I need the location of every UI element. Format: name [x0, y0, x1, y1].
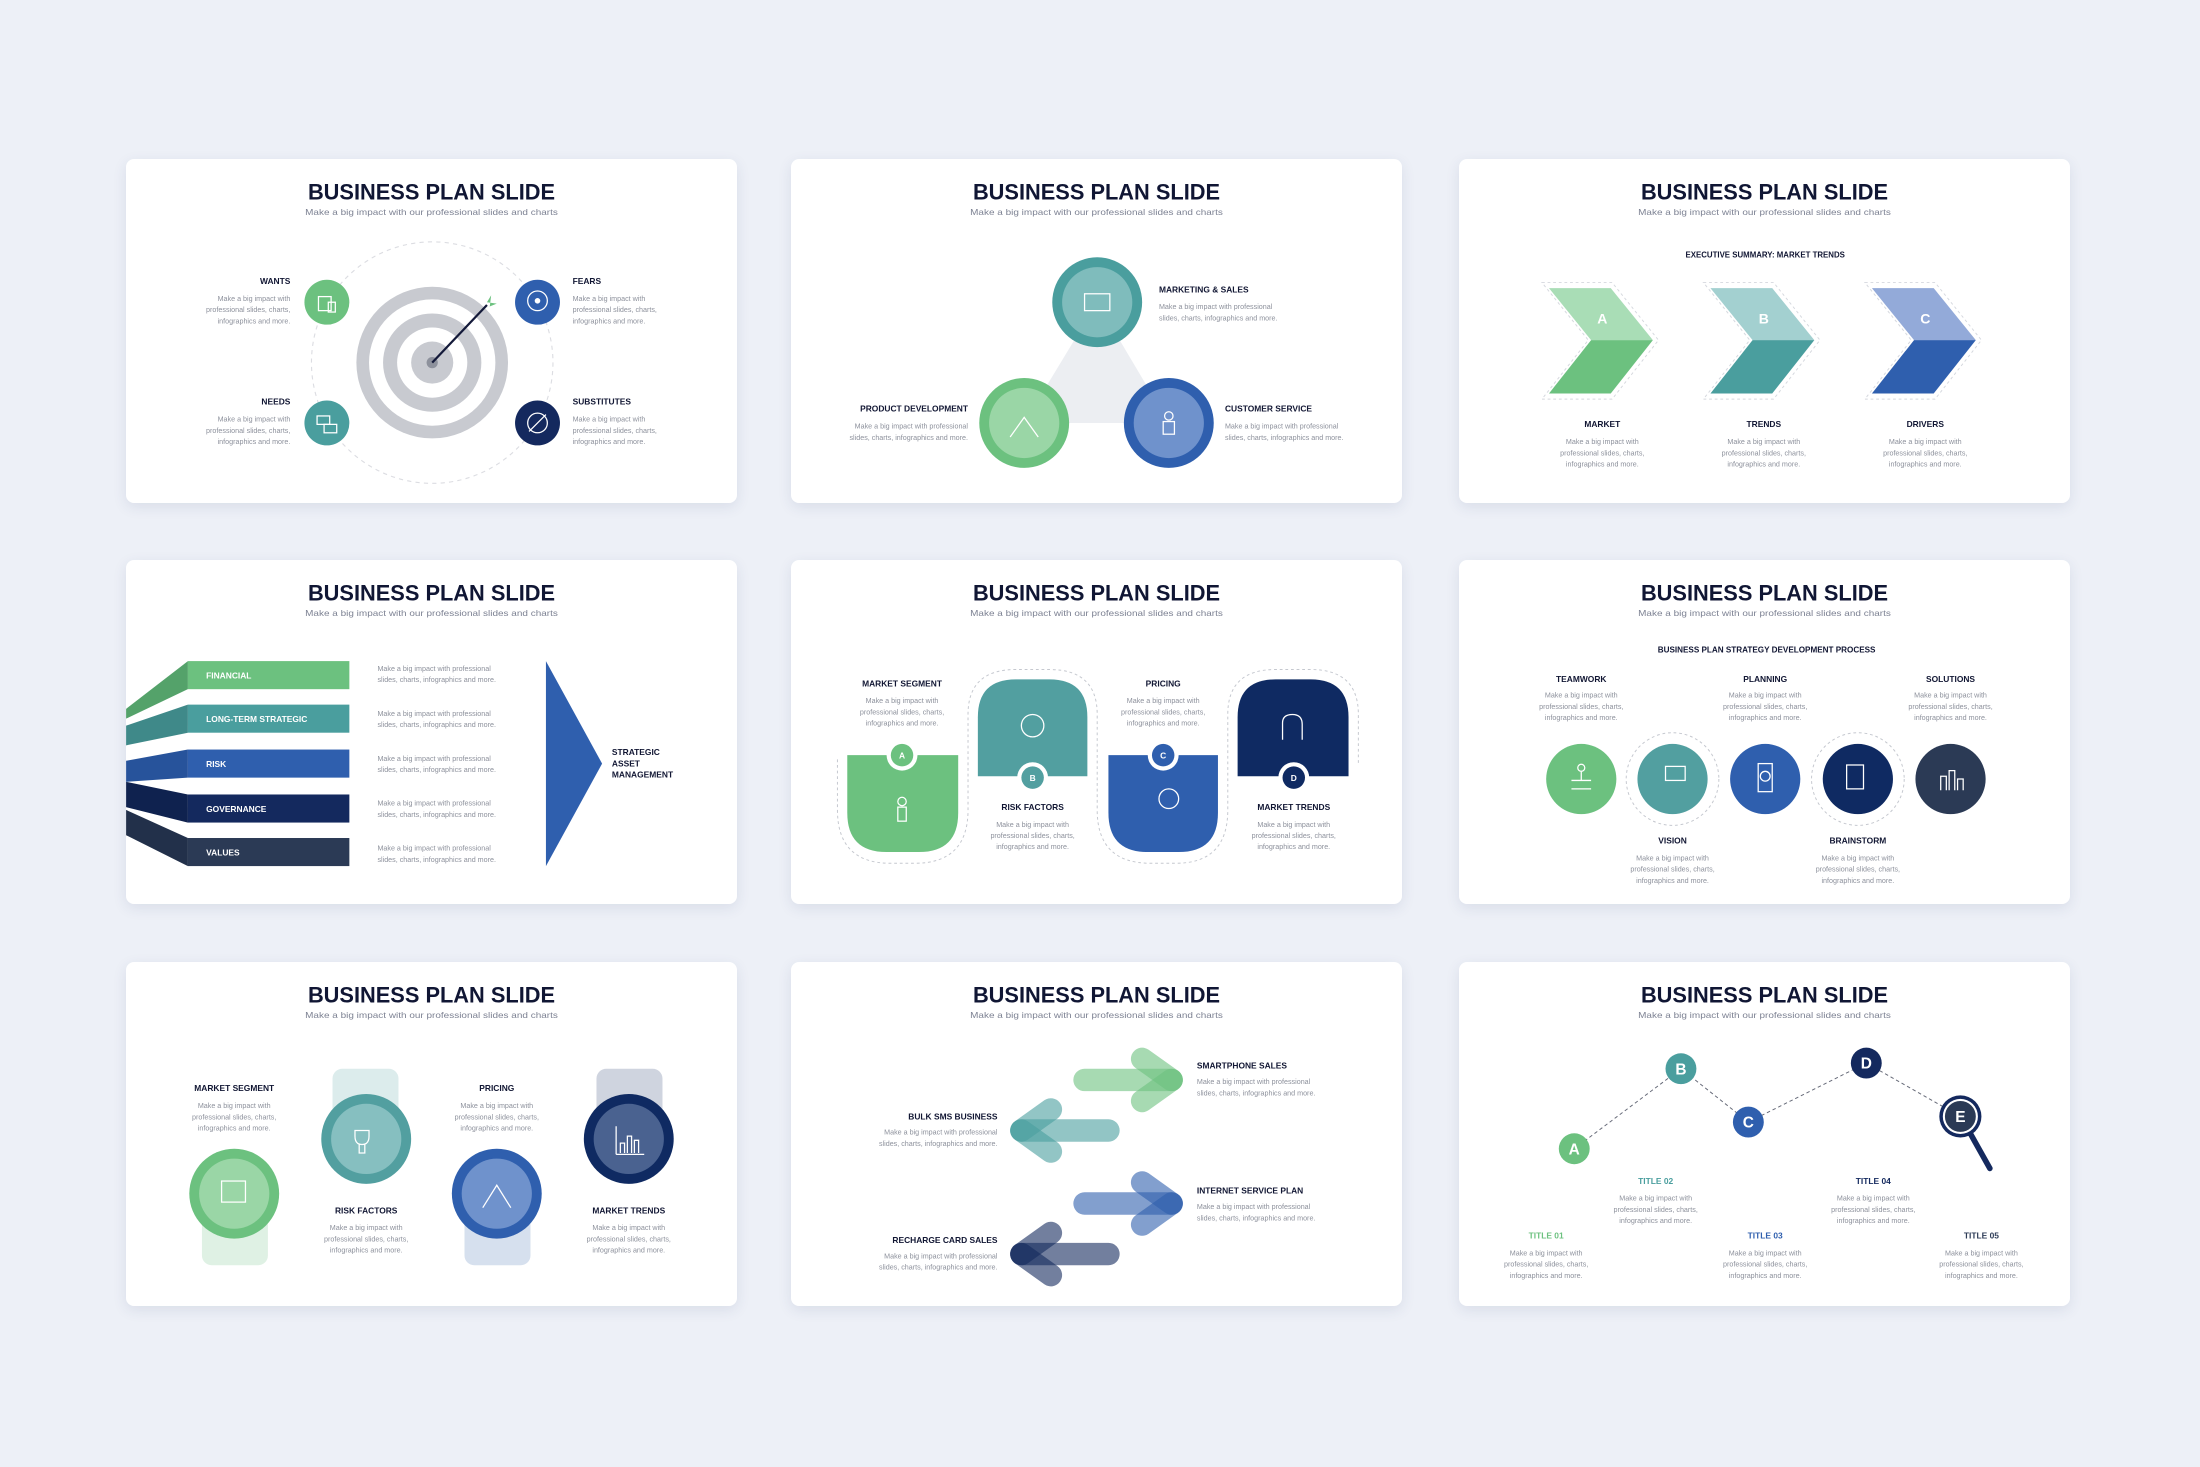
slide 9: zigzag timeline — [1459, 962, 2070, 1306]
title: BUSINESS PLAN SLIDE — [1641, 581, 1888, 606]
text: smartphone sales: Make a big impact with professional — [1197, 1078, 1311, 1086]
slide 1: wants needs fears substitutes — [126, 159, 737, 503]
text: market: infographics and more. — [1566, 460, 1639, 468]
text: brainstorm: professional slides, charts, — [1816, 866, 1900, 874]
title: Make a big impact with our professional slides and charts — [970, 1011, 1223, 1020]
text: brainstorm: infographics and more. — [1821, 877, 1894, 885]
title — [970, 180, 1223, 217]
shape D — [1238, 679, 1349, 793]
title — [970, 983, 1223, 1020]
descriptions — [377, 665, 496, 864]
text: solutions: professional slides, charts, — [1908, 703, 1993, 711]
node D — [1851, 1048, 1882, 1079]
descriptions: slides, charts, infographics and more. — [377, 721, 496, 729]
shape A — [847, 740, 958, 852]
text: title 02: Make a big impact with — [1619, 1195, 1692, 1203]
slide 4: ribbons to triangle — [126, 560, 737, 904]
text: title 05: TITLE 05 — [1964, 1231, 1999, 1241]
watch: market segment — [189, 1149, 279, 1265]
chevron A — [1542, 283, 1658, 399]
text: market trends: MARKET TRENDS — [1257, 802, 1331, 812]
text: solutions: SOLUTIONS — [1926, 674, 1975, 684]
text: pricing: Make a big impact with — [1127, 697, 1200, 705]
target chart — [356, 287, 508, 438]
descriptions: slides, charts, infographics and more. — [377, 856, 496, 864]
text: risk factors: infographics and more. — [996, 843, 1069, 851]
text: strategic asset management: MANAGEMENT — [612, 770, 674, 780]
text: solutions: Make a big impact with — [1914, 692, 1987, 700]
title: Make a big impact with our professional slides and charts — [305, 1011, 558, 1020]
text: title 05: infographics and more. — [1945, 1272, 2018, 1280]
text: pricing: infographics and more. — [460, 1124, 533, 1132]
descriptions: slides, charts, infographics and more. — [377, 676, 496, 684]
text: title 04: professional slides, charts, — [1831, 1206, 1915, 1214]
text: smartphone sales: SMARTPHONE SALES — [1197, 1061, 1287, 1071]
text: teamwork: infographics and more. — [1545, 714, 1618, 722]
text: trends — [1722, 419, 1806, 468]
text: bulk sms business — [879, 1111, 998, 1148]
icon: wants — [304, 280, 349, 325]
text: risk factors: RISK FACTORS — [335, 1205, 398, 1215]
shape B — [978, 679, 1087, 793]
text: substitutes — [573, 397, 657, 446]
icon: substitutes — [515, 401, 560, 445]
text: risk factors — [324, 1205, 408, 1255]
text: title 02 — [1614, 1176, 1698, 1225]
text: teamwork: professional slides, charts, — [1539, 703, 1623, 711]
text: wants: WANTS — [260, 276, 291, 286]
text: product development: slides, charts, infographics and more. — [849, 434, 968, 442]
title — [305, 180, 558, 217]
watch: risk factors — [321, 1069, 411, 1184]
text: customer service: Make a big impact with professional — [1225, 423, 1339, 431]
chevron A: A — [1597, 310, 1607, 326]
ribbon bars: RISK — [206, 759, 226, 769]
shape D: D — [1291, 773, 1297, 783]
circle: customer service — [1124, 378, 1214, 468]
arrow: navy left — [1021, 1233, 1108, 1275]
text: fears — [573, 276, 657, 325]
text: market segment: MARKET SEGMENT — [194, 1083, 275, 1093]
text: internet service plan: Make a big impact with professional — [1197, 1203, 1311, 1211]
text: fears: professional slides, charts, — [573, 306, 657, 314]
title — [1638, 180, 1891, 217]
text: recharge card sales: Make a big impact with professional — [884, 1252, 998, 1260]
chevron B: B — [1759, 310, 1769, 326]
shape B: B — [1030, 773, 1036, 783]
text: substitutes: professional slides, charts, — [573, 427, 657, 435]
text: pricing: professional slides, charts, — [455, 1113, 539, 1121]
text: pricing: infographics and more. — [1127, 720, 1200, 728]
text: product development — [849, 404, 969, 442]
connector triangle — [1024, 302, 1169, 423]
text: market segment: infographics and more. — [198, 1124, 271, 1132]
text: teamwork: TEAMWORK — [1556, 674, 1606, 684]
node B — [1666, 1053, 1696, 1084]
text: internet service plan: slides, charts, infographics and more. — [1197, 1214, 1315, 1222]
title: BUSINESS PLAN SLIDE — [308, 581, 555, 606]
text: market trends: MARKET TRENDS — [592, 1205, 666, 1215]
text: trends: TRENDS — [1747, 419, 1781, 429]
text: risk factors: professional slides, charts, — [324, 1235, 408, 1243]
text: internet service plan: INTERNET SERVICE PLAN — [1197, 1186, 1303, 1196]
text: title 01: TITLE 01 — [1529, 1231, 1564, 1241]
text: vision: VISION — [1658, 836, 1687, 846]
text: brainstorm: BRAINSTORM — [1829, 836, 1886, 846]
circle: marketing & sales — [1052, 257, 1142, 347]
chevron C: C — [1920, 310, 1930, 326]
text: trends: professional slides, charts, — [1722, 449, 1806, 457]
ribbon bars: LONG-TERM STRATEGIC — [206, 714, 307, 724]
text: planning: professional slides, charts, — [1723, 703, 1807, 711]
icon: fears — [515, 280, 560, 325]
text: strategic asset management: STRATEGIC — [612, 747, 660, 757]
text: vision — [1630, 836, 1715, 885]
descriptions: slides, charts, infographics and more. — [377, 766, 496, 774]
text: trends: infographics and more. — [1727, 460, 1800, 468]
text: trends: Make a big impact with — [1727, 438, 1800, 446]
text: market segment: infographics and more. — [866, 720, 938, 728]
text: wants: Make a big impact with — [218, 295, 290, 303]
title — [305, 983, 558, 1020]
circle: product development — [979, 378, 1069, 468]
text: risk factors: infographics and more. — [330, 1247, 403, 1255]
text: needs: infographics and more. — [218, 438, 290, 446]
text: solutions: infographics and more. — [1914, 714, 1987, 722]
descriptions: Make a big impact with professional — [377, 845, 491, 853]
title: BUSINESS PLAN SLIDE — [973, 983, 1220, 1008]
text: needs: professional slides, charts, — [206, 427, 290, 435]
text: internet service plan — [1197, 1186, 1315, 1222]
chevron B — [1703, 283, 1820, 399]
triangle arrow — [546, 661, 602, 866]
text: drivers: infographics and more. — [1889, 460, 1962, 468]
title: BUSINESS PLAN SLIDE — [973, 180, 1220, 205]
title: Make a big impact with our professional slides and charts — [970, 609, 1223, 618]
text: risk factors: Make a big impact with — [330, 1224, 403, 1232]
shape C — [1108, 740, 1218, 852]
text: teamwork — [1539, 674, 1623, 722]
text: pricing: PRICING — [479, 1083, 515, 1093]
slide 3: chevrons — [1459, 159, 2070, 503]
ribbon bars — [126, 661, 349, 866]
text: risk factors: Make a big impact with — [996, 821, 1069, 829]
text: title 04: Make a big impact with — [1837, 1195, 1910, 1203]
text: recharge card sales: RECHARGE CARD SALES — [892, 1235, 998, 1245]
descriptions: Make a big impact with professional — [377, 755, 491, 763]
text: customer service: CUSTOMER SERVICE — [1225, 404, 1312, 414]
text: title 01: infographics and more. — [1510, 1272, 1583, 1280]
node E magnifier: E — [1955, 1109, 1966, 1126]
text: substitutes: Make a big impact with — [573, 416, 645, 424]
slide 5: alternating shapes — [791, 560, 1402, 904]
text: vision: Make a big impact with — [1636, 854, 1709, 862]
text: title 01: professional slides, charts, — [1504, 1261, 1588, 1269]
title: Make a big impact with our professional slides and charts — [1638, 1011, 1891, 1020]
text: planning: PLANNING — [1743, 674, 1788, 684]
text: title 03: TITLE 03 — [1748, 1231, 1783, 1241]
node C — [1733, 1107, 1764, 1138]
text: wants: professional slides, charts, — [206, 306, 290, 314]
text: risk factors: RISK FACTORS — [1001, 802, 1064, 812]
text: vision: infographics and more. — [1636, 877, 1709, 885]
text: market trends: Make a big impact with — [592, 1224, 665, 1232]
title — [970, 581, 1223, 618]
text: strategic asset management: ASSET — [612, 758, 641, 768]
icon: needs — [304, 401, 349, 445]
title: BUSINESS PLAN SLIDE — [973, 581, 1220, 606]
ribbon bars: VALUES — [206, 848, 240, 858]
text: market trends — [1252, 802, 1336, 851]
text: drivers — [1883, 419, 1967, 468]
text: market trends: infographics and more. — [1257, 843, 1330, 851]
text: fears: infographics and more. — [573, 317, 645, 325]
slide 7: watch circles — [126, 962, 737, 1306]
text: market trends: professional slides, charts, — [587, 1235, 671, 1243]
text: market: MARKET — [1584, 419, 1621, 429]
text: title 05: Make a big impact with — [1945, 1249, 2018, 1257]
text: market trends: infographics and more. — [592, 1247, 665, 1255]
slide 6: strategy process circles — [1459, 560, 2070, 904]
text: title 03: infographics and more. — [1729, 1272, 1802, 1280]
arrow: blue right — [1085, 1182, 1172, 1225]
text: fears: Make a big impact with — [573, 295, 645, 303]
text: needs: Make a big impact with — [218, 416, 290, 424]
text: bulk sms business: Make a big impact with professional — [884, 1129, 998, 1137]
title: BUSINESS PLAN SLIDE — [1641, 983, 1888, 1008]
node C: C — [1743, 1115, 1754, 1132]
text: planning: infographics and more. — [1729, 714, 1802, 722]
text: smartphone sales — [1197, 1061, 1315, 1097]
arrow: teal left — [1021, 1109, 1108, 1152]
text: market segment: Make a big impact with — [866, 697, 938, 705]
text: planning — [1723, 674, 1807, 722]
text: market segment: Make a big impact with — [198, 1102, 271, 1110]
node A: A — [1569, 1141, 1580, 1158]
subheading: BUSINESS PLAN STRATEGY DEVELOPMENT PROCESS — [1658, 646, 1876, 655]
text: market segment: professional slides, charts, — [860, 708, 944, 716]
text: pricing: professional slides, charts, — [1121, 708, 1205, 716]
text: market trends: Make a big impact with — [1257, 821, 1330, 829]
title: Make a big impact with our professional slides and charts — [1638, 609, 1891, 618]
text: pricing — [1121, 678, 1205, 728]
descriptions: Make a big impact with professional — [377, 665, 491, 673]
text: market — [1560, 419, 1644, 468]
title: BUSINESS PLAN SLIDE — [308, 983, 555, 1008]
text: pricing — [455, 1083, 539, 1132]
node A — [1559, 1133, 1590, 1164]
text: title 05 — [1939, 1231, 2024, 1280]
text: market: professional slides, charts, — [1560, 449, 1644, 457]
text: risk factors — [990, 802, 1075, 851]
slide 2: triangle cycle — [791, 159, 1402, 503]
text: planning: Make a big impact with — [1729, 692, 1802, 700]
title: Make a big impact with our professional slides and charts — [305, 609, 558, 618]
text: marketing & sales: MARKETING & SALES — [1159, 284, 1249, 294]
descriptions: Make a big impact with professional — [377, 710, 491, 718]
text: marketing & sales — [1159, 284, 1278, 322]
subheading: EXECUTIVE SUMMARY: MARKET TRENDS — [1686, 250, 1845, 259]
node B: B — [1675, 1061, 1687, 1078]
text: fears: FEARS — [573, 276, 601, 286]
text: title 03 — [1723, 1231, 1807, 1280]
title: Make a big impact with our professional slides and charts — [305, 208, 558, 217]
text: vision: professional slides, charts, — [1630, 866, 1715, 874]
title — [305, 581, 558, 618]
title — [1638, 581, 1891, 618]
text: pricing: Make a big impact with — [460, 1102, 533, 1110]
text: market segment: MARKET SEGMENT — [862, 678, 943, 688]
text: needs — [206, 397, 291, 446]
slide 8: arrows — [791, 962, 1402, 1306]
text: title 01 — [1504, 1231, 1588, 1280]
text: title 02: infographics and more. — [1619, 1217, 1692, 1225]
text: wants — [206, 276, 291, 325]
text: product development: Make a big impact with professional — [855, 423, 968, 431]
text: title 03: professional slides, charts, — [1723, 1261, 1807, 1269]
watch: pricing — [452, 1149, 542, 1265]
descriptions: Make a big impact with professional — [377, 800, 491, 808]
text: substitutes: SUBSTITUTES — [573, 397, 631, 407]
text: title 05: professional slides, charts, — [1939, 1261, 2024, 1269]
text: title 01: Make a big impact with — [1510, 1249, 1583, 1257]
watch: market trends — [584, 1069, 674, 1184]
title — [1638, 983, 1891, 1020]
descriptions: slides, charts, infographics and more. — [377, 811, 496, 819]
text: wants: infographics and more. — [218, 317, 290, 325]
text: marketing & sales: Make a big impact with professional — [1159, 303, 1273, 311]
text: smartphone sales: slides, charts, infographics and more. — [1197, 1089, 1315, 1097]
text: strategic asset management — [612, 747, 674, 780]
text: market segment — [192, 1083, 276, 1132]
text: customer service — [1225, 404, 1344, 442]
arrow: green right — [1085, 1059, 1172, 1101]
text: market segment — [860, 678, 944, 728]
text: title 04: infographics and more. — [1837, 1217, 1910, 1225]
shape C: C — [1160, 751, 1166, 761]
text: customer service: slides, charts, infographics and more. — [1225, 434, 1344, 442]
text: market: Make a big impact with — [1566, 438, 1639, 446]
node E magnifier — [1939, 1095, 1990, 1168]
text: brainstorm: Make a big impact with — [1821, 854, 1894, 862]
text: needs: NEEDS — [261, 397, 291, 407]
text: marketing & sales: slides, charts, infographics and more. — [1159, 314, 1278, 322]
text: market trends — [587, 1205, 671, 1255]
chevron C — [1865, 283, 1981, 399]
text: drivers: professional slides, charts, — [1883, 449, 1967, 457]
node D: D — [1861, 1056, 1872, 1073]
text: brainstorm — [1816, 836, 1900, 885]
title: Make a big impact with our professional slides and charts — [1638, 208, 1891, 217]
text: product development: PRODUCT DEVELOPMENT — [860, 404, 969, 414]
text: title 03: Make a big impact with — [1729, 1249, 1802, 1257]
text: drivers: DRIVERS — [1907, 419, 1944, 429]
text: title 02: TITLE 02 — [1638, 1176, 1674, 1186]
text: recharge card sales: slides, charts, infographics and more. — [879, 1263, 998, 1271]
text: drivers: Make a big impact with — [1889, 438, 1962, 446]
ribbon bars: GOVERNANCE — [206, 804, 267, 814]
text: market segment: professional slides, charts, — [192, 1113, 276, 1121]
text: recharge card sales — [879, 1235, 998, 1271]
title: Make a big impact with our professional slides and charts — [970, 208, 1223, 217]
text: market trends: professional slides, charts, — [1252, 832, 1336, 840]
circles row — [1546, 744, 1986, 814]
text: solutions — [1908, 674, 1993, 722]
title: BUSINESS PLAN SLIDE — [1641, 180, 1888, 205]
title: BUSINESS PLAN SLIDE — [308, 180, 555, 205]
text: bulk sms business: slides, charts, infographics and more. — [879, 1140, 998, 1148]
text: title 04 — [1831, 1176, 1915, 1225]
ribbon bars: FINANCIAL — [206, 671, 251, 681]
text: title 02: professional slides, charts, — [1614, 1206, 1698, 1214]
text: title 04: TITLE 04 — [1856, 1176, 1891, 1186]
text: substitutes: infographics and more. — [573, 438, 645, 446]
text: pricing: PRICING — [1146, 678, 1181, 688]
text: bulk sms business: BULK SMS BUSINESS — [908, 1111, 998, 1121]
text: risk factors: professional slides, charts, — [990, 832, 1075, 840]
text: teamwork: Make a big impact with — [1545, 692, 1618, 700]
shape A: A — [899, 751, 905, 761]
